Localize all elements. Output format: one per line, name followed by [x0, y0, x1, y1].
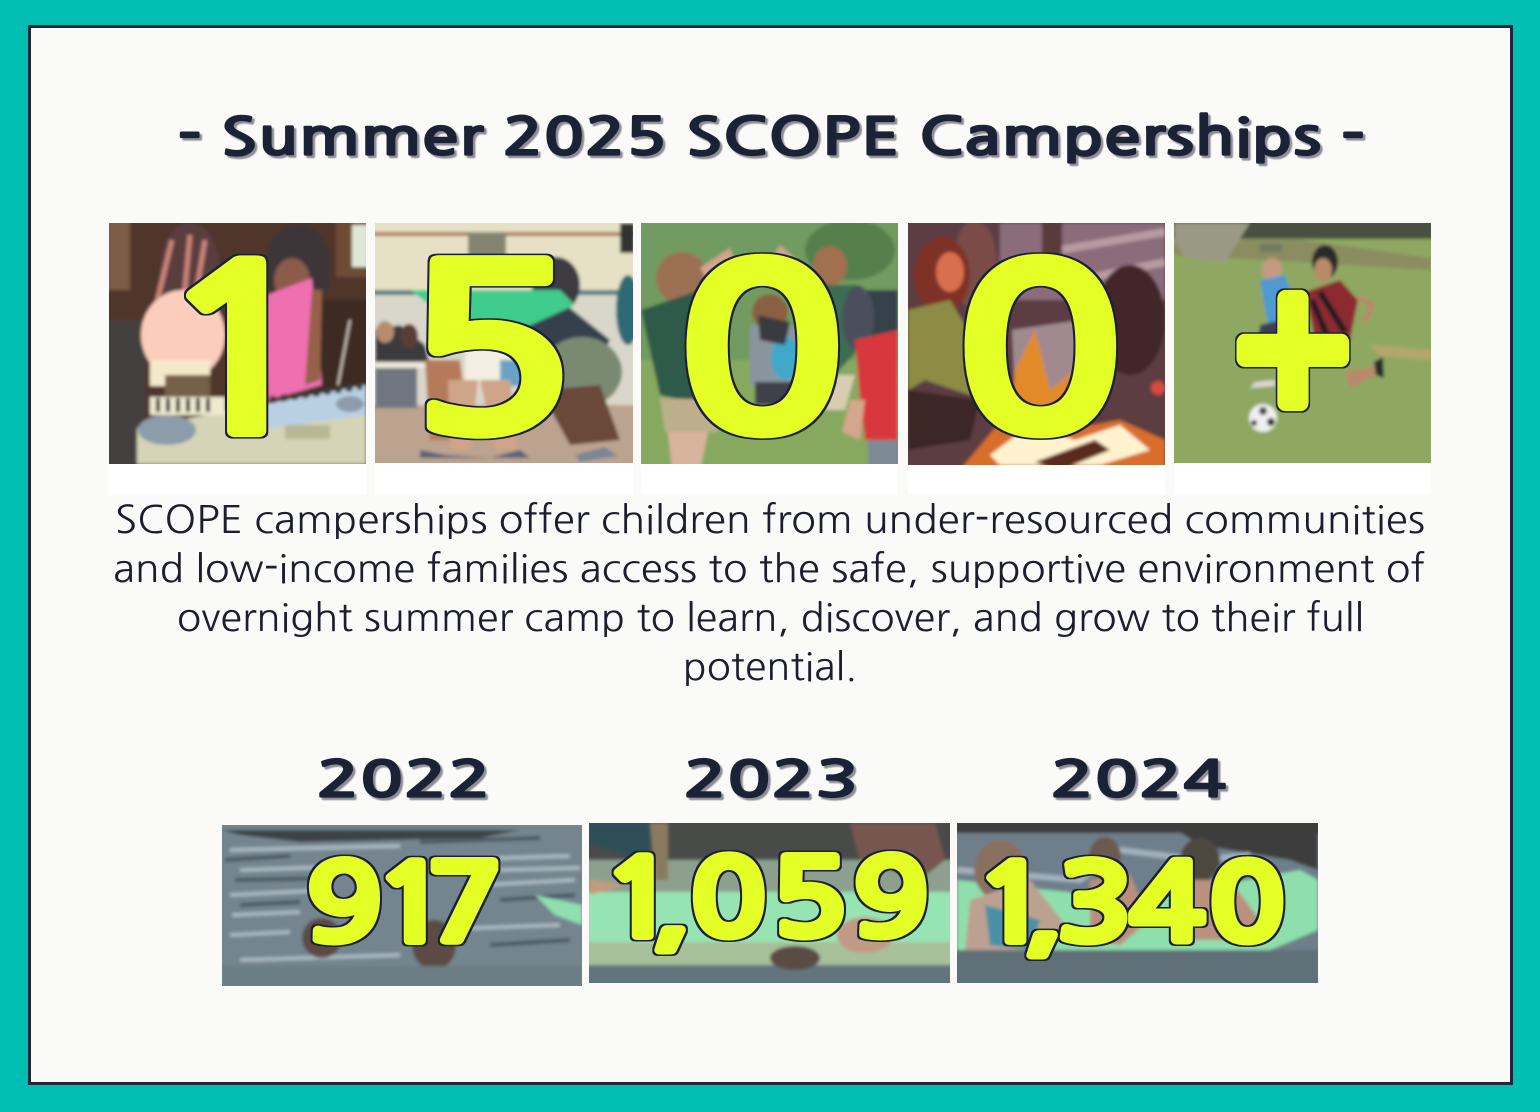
large number 1500+: + — [1233, 260, 1352, 455]
description text: potential. — [683, 648, 857, 686]
large number 1500+: 1500 — [154, 240, 1126, 468]
number 1,340: 1,340 — [974, 853, 1286, 957]
photo card: campfire — [900, 215, 1175, 495]
number 1,059: 1,059 — [601, 848, 930, 952]
year heading 2023: 2023 — [683, 756, 859, 805]
photo card: staff and campers in archway — [630, 215, 910, 495]
year heading 2022: 2022 — [316, 756, 491, 805]
title: - Summer 2025 SCOPE Camperships - — [177, 111, 1365, 163]
number 917: 917 — [306, 853, 504, 957]
photo card: boys playing soccer — [1165, 215, 1440, 495]
description text: SCOPE camperships offer children from under-resourced communities — [115, 501, 1425, 539]
photo card: girls at keyboard — [100, 215, 375, 495]
description text: overnight summer camp to learn, discover, and grow to their full — [177, 599, 1364, 637]
photo strip: five camp photos — [100, 215, 1440, 495]
photo card: group hug in hall — [365, 215, 645, 495]
photo: kids on water mat 2024 — [957, 823, 1318, 983]
description text: and low-income families access to the safe, supportive environment of — [113, 550, 1425, 588]
year heading 2024: 2024 — [1050, 756, 1227, 805]
photo: kids on water mat 2023 — [589, 823, 950, 983]
description text — [113, 501, 1425, 686]
photo: swimmers in lake 2022 — [222, 825, 582, 986]
